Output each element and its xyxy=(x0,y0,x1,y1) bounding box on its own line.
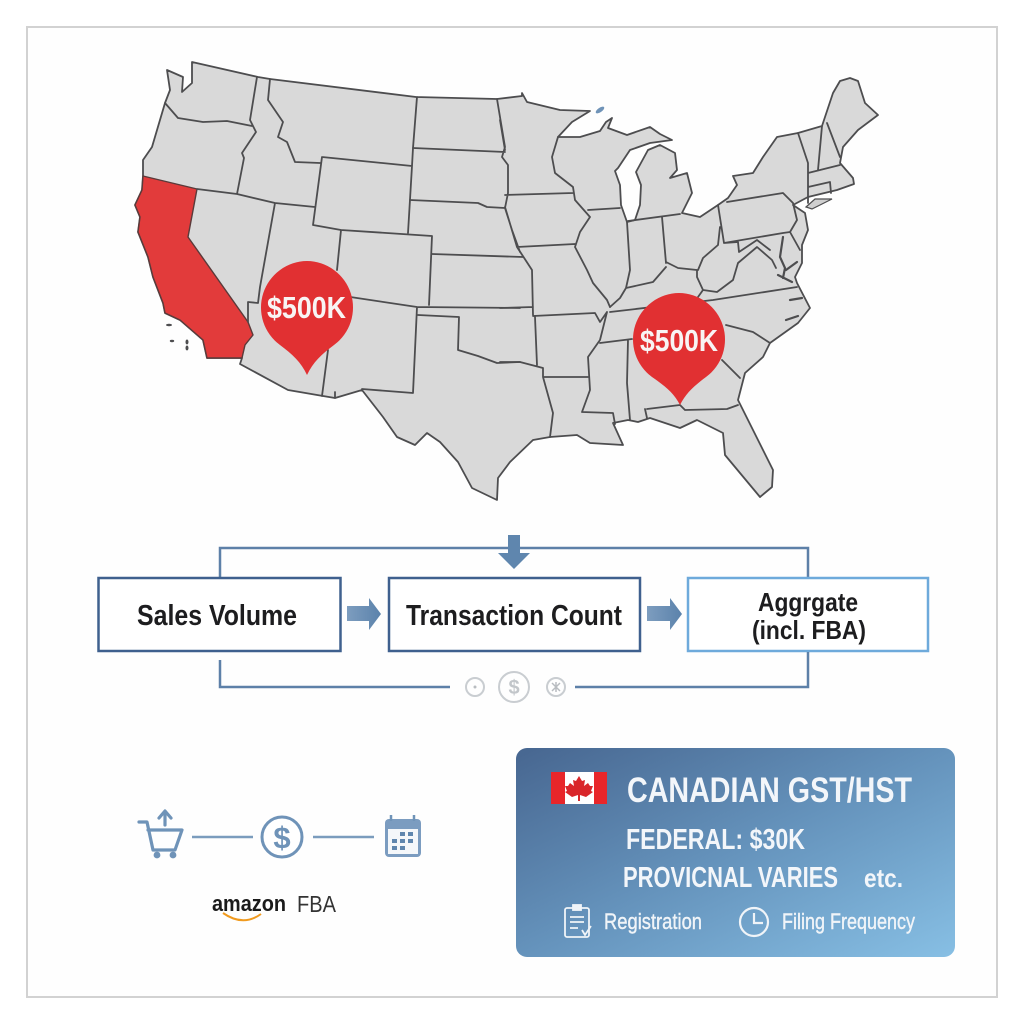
icon: dollar coin: $ xyxy=(273,820,291,855)
box: aggregate incl. FBA: Aggrgate xyxy=(758,587,858,617)
panel: Canadian GST/HST xyxy=(516,748,955,957)
amazon FBA logo: amazon xyxy=(212,891,286,916)
map: state borders xyxy=(165,77,840,437)
map pin: $500K west: $500K xyxy=(267,290,347,325)
lower-left icon row xyxy=(139,811,421,858)
box: aggregate incl. FBA: (incl. FBA) xyxy=(752,615,866,645)
map: Long Island xyxy=(806,199,832,209)
faded icons on connector: $ xyxy=(508,677,520,699)
connector line xyxy=(192,836,253,838)
map: California highlighted xyxy=(135,176,253,358)
box: transaction count: Transaction Count xyxy=(406,600,622,632)
icon: registration clipboard xyxy=(565,905,591,937)
top connector xyxy=(220,548,808,578)
map: Pacific and Great Lakes details xyxy=(166,105,605,350)
box: aggregate incl. FBA xyxy=(688,578,928,651)
map pin: $500K southeast: $500K xyxy=(640,323,719,358)
faded icons on connector xyxy=(466,672,565,702)
arrow: down into flow xyxy=(498,535,530,569)
heading: CANADIAN GST/HST xyxy=(627,771,912,810)
amazon FBA logo xyxy=(212,891,337,920)
arrow: transaction to aggregate xyxy=(647,598,682,630)
filing frequency label: Filing Frequency xyxy=(782,909,915,934)
icon: dollar coin xyxy=(262,817,302,857)
icon: shopping cart with arrow xyxy=(139,811,182,858)
icon: calendar xyxy=(385,815,421,857)
registration label: Registration xyxy=(604,909,702,934)
etc. note: etc. xyxy=(864,863,903,893)
map: United States xyxy=(135,62,878,500)
bottom connector xyxy=(220,652,808,687)
arrow: sales to transaction xyxy=(347,598,381,630)
connector line xyxy=(313,836,374,838)
flow diagram xyxy=(98,535,928,702)
box: sales volume: Sales Volume xyxy=(137,600,297,632)
map pin: $500K west xyxy=(261,261,353,375)
provincial note: PROVICNAL VARIES xyxy=(623,862,838,894)
map pin: $500K southeast xyxy=(633,293,725,405)
box: sales volume xyxy=(98,578,340,651)
icon: clock xyxy=(740,908,768,936)
box: transaction count xyxy=(389,578,640,651)
icon: Canadian flag xyxy=(551,772,607,804)
amazon FBA logo: FBA xyxy=(297,891,337,917)
map: land outline xyxy=(135,62,878,500)
federal threshold: FEDERAL: $30K xyxy=(626,824,805,856)
